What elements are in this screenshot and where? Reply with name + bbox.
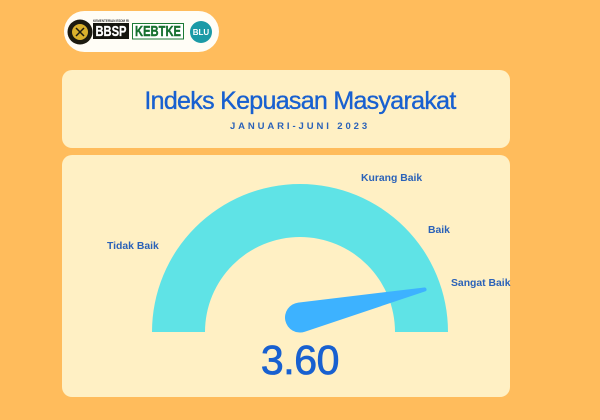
icon: BLU badge	[190, 21, 212, 43]
logo wordmark	[93, 19, 184, 40]
gauge value: 3.60	[261, 337, 339, 383]
logo pill	[64, 11, 219, 52]
gauge needle	[285, 287, 427, 332]
panel: gauge	[62, 155, 510, 397]
subtitle: JANUARI-JUNI 2023	[230, 121, 370, 132]
logo wordmark: KEBTKE	[135, 24, 181, 40]
label: Kurang Baik: Kurang Baik	[361, 173, 422, 184]
label: Baik: Baik	[428, 225, 450, 236]
panel: title	[62, 70, 510, 148]
logo wordmark: BBSP	[96, 24, 127, 40]
icon: emblem	[68, 20, 92, 44]
label: Sangat Baik: Sangat Baik	[451, 278, 510, 289]
icon: BLU badge: BLU	[193, 28, 209, 37]
title: Indeks Kepuasan Masyarakat	[144, 87, 456, 115]
label: Tidak Baik: Tidak Baik	[107, 241, 159, 252]
logo wordmark: KEMENTERIAN ESDM RI	[93, 19, 129, 23]
gauge arc	[152, 184, 448, 332]
